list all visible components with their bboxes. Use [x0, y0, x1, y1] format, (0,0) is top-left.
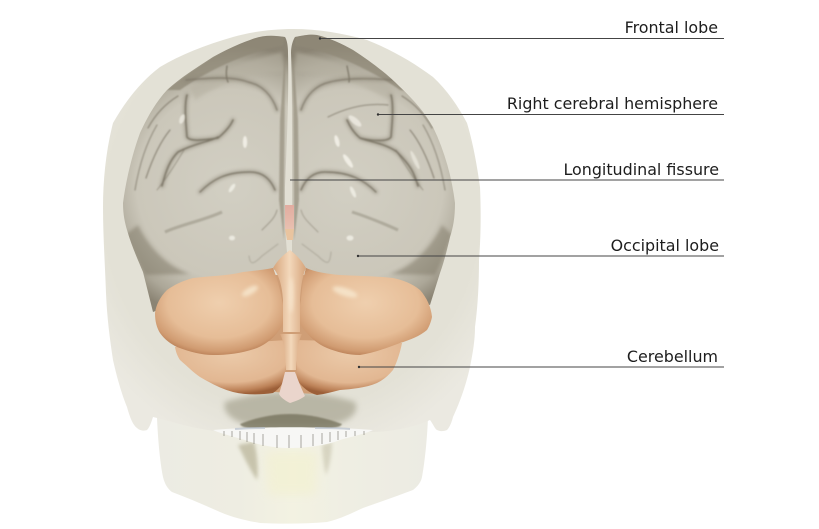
cerebellum: lower right lobe [296, 340, 402, 395]
skull: mandible [157, 418, 428, 524]
cerebellum: upper left lobe [155, 268, 284, 355]
skull: cranium [103, 29, 481, 432]
skull: occipital shading [224, 392, 356, 429]
label: Right cerebral hemisphere: Right cerebral hemisphere [507, 94, 718, 113]
label: Longitudinal fissure: Longitudinal fissure [563, 160, 719, 179]
cerebellum: lower vermis [280, 334, 302, 370]
upper teeth [213, 427, 373, 448]
cerebellum: upper right lobe [299, 268, 432, 355]
cerebellum: highlights [240, 277, 359, 313]
illustration: skull with brain, posterior view [103, 29, 481, 524]
cerebellum: upper vermis [273, 250, 306, 332]
cerebellum: lower left lobe [175, 340, 287, 394]
left cerebral hemisphere [123, 36, 288, 312]
label: Cerebellum: Cerebellum [627, 347, 718, 366]
brainstem / falx in fissure [285, 205, 294, 240]
cerebellum: base fill [235, 275, 345, 394]
label: Occipital lobe: Occipital lobe [611, 236, 719, 255]
cerebellum: tonsil membrane [279, 372, 305, 403]
label: Frontal lobe: Frontal lobe [625, 18, 718, 37]
cerebellum [155, 250, 432, 403]
right cerebral hemisphere [291, 35, 455, 305]
